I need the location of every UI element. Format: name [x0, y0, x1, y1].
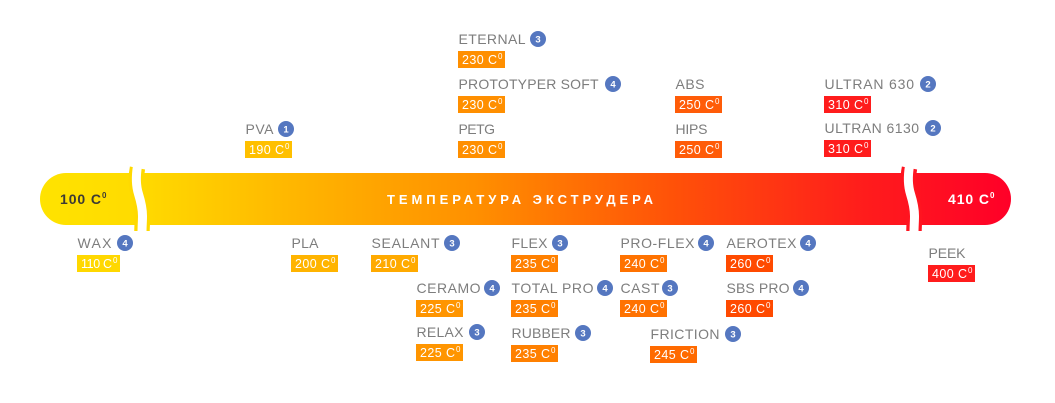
ULTRAN 630 310: ULTRAN 630 — [824, 76, 914, 92]
ULTRAN 6130 310: ULTRAN 6130 — [824, 120, 919, 136]
PROTOTYPER SOFT 230 — [458, 76, 621, 113]
RUBBER 235: 235 C — [515, 347, 550, 361]
PETG 230: 0 — [498, 142, 503, 151]
SEALANT 210: 210 C — [375, 257, 410, 271]
ULTRAN 630 310: 0 — [864, 97, 869, 106]
TOTAL PRO 235: 0 — [551, 301, 556, 310]
ULTRAN 630 310 — [824, 76, 936, 113]
TOTAL PRO 235 — [511, 280, 613, 317]
PRO-FLEX 240 — [620, 235, 714, 272]
ETERNAL 230: 3 — [535, 34, 541, 46]
PLA 200 — [291, 235, 338, 272]
CAST 240: 3 — [667, 284, 673, 294]
ULTRAN 630 310: 310 C — [828, 98, 863, 112]
PVA 190: 0 — [285, 142, 290, 151]
CAST 240: 0 — [660, 301, 665, 310]
FRICTION 245: 0 — [690, 347, 695, 356]
SEALANT 210: 3 — [449, 238, 455, 250]
AEROTEX 260: 0 — [766, 256, 771, 265]
CERAMO 225 — [416, 280, 500, 317]
PEEK 400: 400 C — [932, 267, 967, 281]
ETERNAL 230: ETERNAL — [458, 31, 526, 47]
temperature scale bar — [40, 166, 1011, 233]
RUBBER 235: RUBBER — [512, 325, 570, 341]
FLEX 235: FLEX — [512, 235, 548, 251]
SBS PRO 260: 4 — [798, 284, 804, 294]
ULTRAN 6130 310 — [824, 120, 941, 157]
PROTOTYPER SOFT 230: 230 C — [462, 98, 497, 112]
ULTRAN 6130 310: 2 — [930, 124, 936, 134]
PETG 230 — [458, 121, 505, 158]
PVA 190: PVA — [246, 121, 274, 137]
WAX 110: 110 C — [81, 257, 112, 271]
HIPS 250: HIPS — [676, 121, 708, 137]
SBS PRO 260: 0 — [766, 301, 771, 310]
FRICTION 245: FRICTION — [650, 326, 720, 342]
ULTRAN 630 310: 2 — [925, 80, 931, 90]
RUBBER 235: 0 — [551, 346, 556, 355]
PLA 200: PLA — [292, 235, 319, 251]
HIPS 250: 250 C — [679, 143, 714, 157]
ETERNAL 230: 0 — [498, 52, 503, 61]
SBS PRO 260: SBS PRO — [726, 280, 790, 296]
PVA 190 — [245, 121, 294, 158]
TOTAL PRO 235: TOTAL PRO — [512, 280, 594, 296]
PRO-FLEX 240: 240 C — [624, 257, 659, 271]
ABS 250: ABS — [676, 76, 704, 92]
PROTOTYPER SOFT 230: 0 — [498, 97, 503, 106]
CERAMO 225: CERAMO — [416, 280, 481, 296]
SEALANT 210 — [371, 235, 460, 272]
RUBBER 235 — [511, 325, 591, 362]
WAX 110 — [77, 235, 133, 272]
RUBBER 235: 3 — [580, 328, 586, 340]
SBS PRO 260 — [726, 280, 809, 317]
RELAX 225: 0 — [456, 345, 461, 354]
FLEX 235 — [511, 235, 568, 272]
HIPS 250 — [675, 121, 722, 158]
scale title: ТЕМПЕРАТУРА ЭКСТРУДЕРА — [387, 192, 654, 207]
PETG 230: PETG — [458, 121, 495, 137]
WAX 110: 0 — [113, 256, 118, 265]
scale minimum: 100 C: 0 — [102, 191, 107, 200]
WAX 110: 4 — [122, 238, 128, 250]
RELAX 225 — [416, 324, 485, 361]
AEROTEX 260: 4 — [805, 238, 811, 250]
FLEX 235: 235 C — [515, 257, 550, 271]
SEALANT 210: SEALANT — [372, 235, 440, 251]
scale minimum: 100 C: 100 C — [60, 191, 101, 207]
AEROTEX 260: 260 C — [730, 257, 765, 271]
RELAX 225: 3 — [474, 328, 480, 338]
ABS 250: 250 C — [679, 98, 714, 112]
CAST 240: CAST — [620, 280, 660, 296]
ULTRAN 6130 310: 310 C — [828, 142, 863, 156]
ABS 250 — [675, 76, 722, 113]
ABS 250: 0 — [715, 97, 720, 106]
FLEX 235: 0 — [551, 256, 556, 265]
ULTRAN 6130 310: 0 — [864, 141, 869, 150]
SBS PRO 260: 260 C — [730, 302, 765, 316]
FLEX 235: 3 — [557, 238, 563, 250]
TOTAL PRO 235: 4 — [602, 284, 608, 294]
AEROTEX 260 — [726, 235, 816, 272]
PLA 200: 200 C — [295, 257, 330, 271]
CERAMO 225: 4 — [489, 284, 495, 294]
scale maximum: 410 C: 410 C — [948, 191, 989, 207]
PETG 230: 230 C — [462, 143, 497, 157]
PEEK 400 — [928, 245, 975, 282]
PRO-FLEX 240: PRO-FLEX — [620, 235, 695, 251]
FRICTION 245: 3 — [730, 330, 736, 340]
WAX 110: WAX — [78, 235, 112, 251]
CAST 240 — [620, 280, 678, 317]
PRO-FLEX 240: 0 — [660, 256, 665, 265]
PEEK 400: PEEK — [928, 245, 966, 261]
AEROTEX 260: AEROTEX — [726, 235, 797, 251]
CERAMO 225: 225 C — [420, 302, 455, 316]
PEEK 400: 0 — [968, 266, 973, 275]
scale maximum: 410 C: 0 — [990, 191, 995, 200]
RELAX 225: 225 C — [420, 346, 455, 360]
SEALANT 210: 0 — [411, 256, 416, 265]
CAST 240: 240 C — [624, 302, 659, 316]
ETERNAL 230: 230 C — [462, 53, 497, 67]
HIPS 250: 0 — [715, 142, 720, 151]
PROTOTYPER SOFT 230: PROTOTYPER SOFT — [458, 76, 599, 92]
PVA 190: 1 — [283, 124, 289, 136]
ETERNAL 230 — [458, 31, 546, 68]
PVA 190: 190 C — [249, 143, 284, 157]
RELAX 225: RELAX — [416, 324, 464, 340]
FRICTION 245: 245 C — [654, 348, 689, 362]
PROTOTYPER SOFT 230: 4 — [610, 80, 616, 90]
PRO-FLEX 240: 4 — [703, 238, 709, 250]
CERAMO 225: 0 — [456, 301, 461, 310]
PLA 200: 0 — [331, 256, 336, 265]
TOTAL PRO 235: 235 C — [515, 302, 550, 316]
FRICTION 245 — [650, 326, 741, 363]
